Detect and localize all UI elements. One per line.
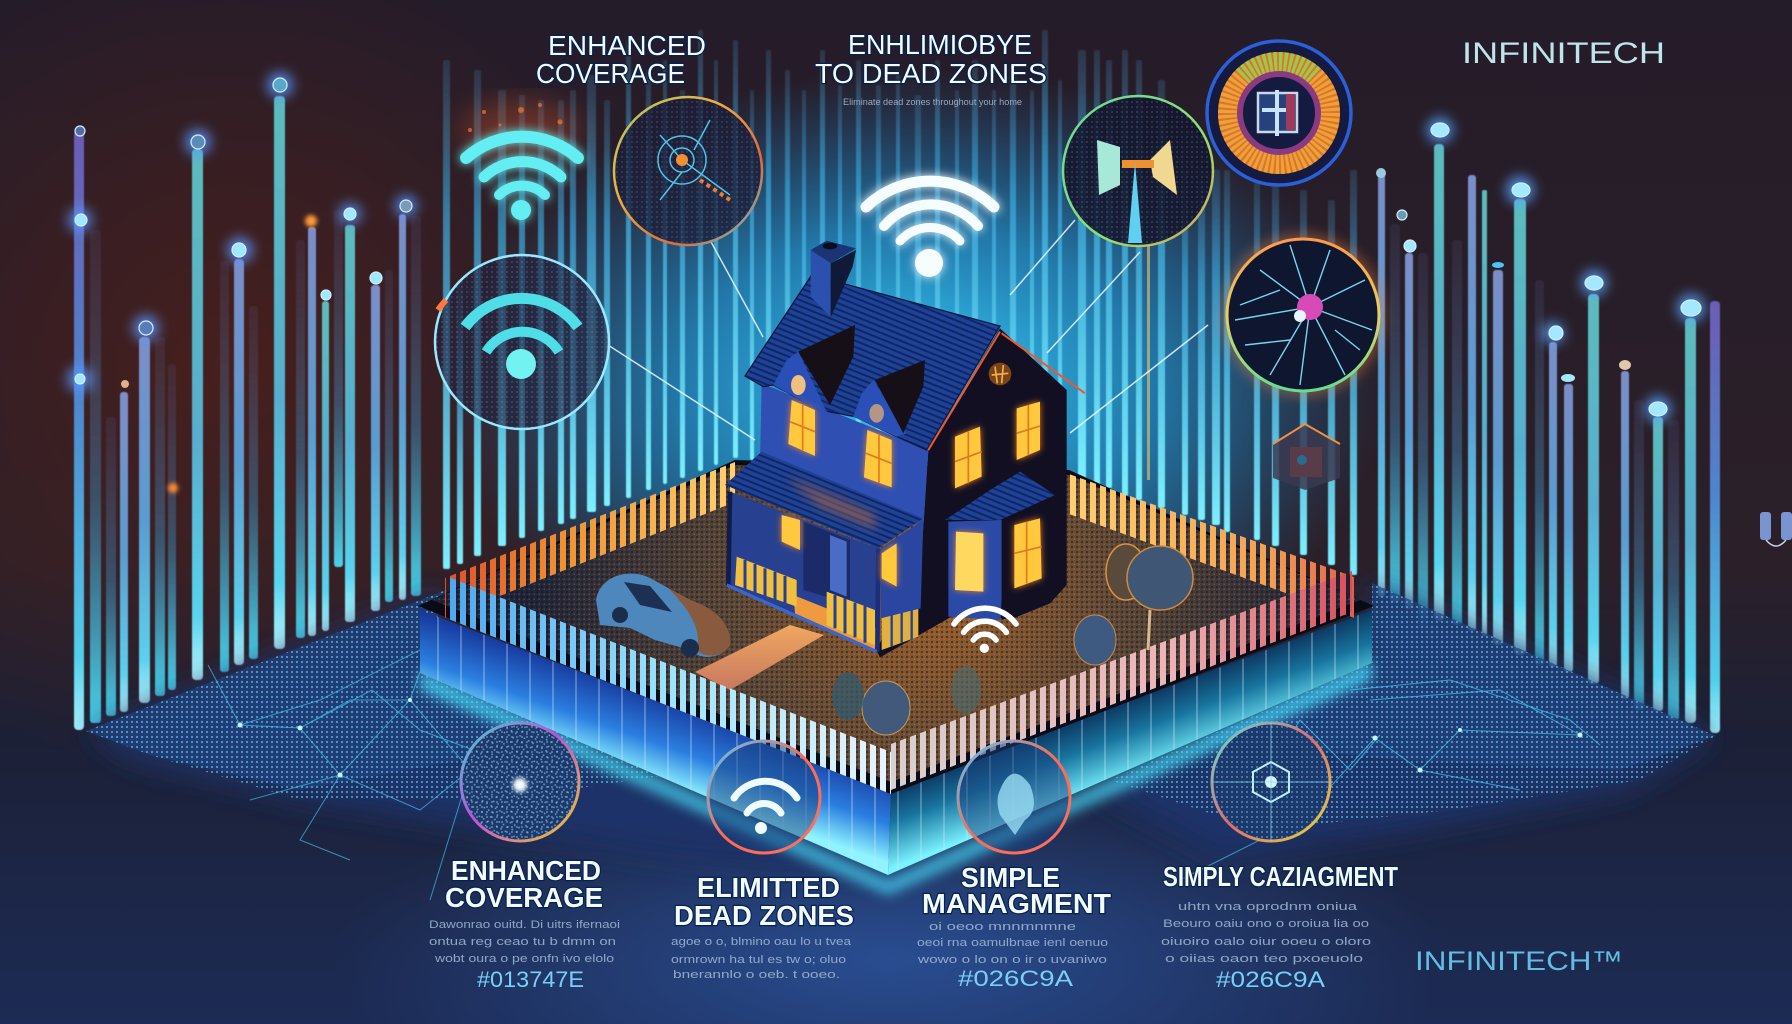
central signal bars (443, 30, 1357, 575)
network floor: left (86, 590, 888, 900)
text block: simple management: MANAGMENT (922, 888, 1111, 919)
heading: enhanced coverage top: ENHANCED (548, 30, 706, 61)
text block: enhanced coverage: COVERAGE (445, 882, 603, 913)
text block: simple management: wowo o lo on o ir o uvaniwo (917, 954, 1107, 966)
small subtitle: Eliminate dead zones throughout your home (843, 97, 1022, 107)
yellow antenna mast (1147, 245, 1150, 480)
text block: enhanced coverage: wobt oura o pe onfn ivo elolo (434, 953, 614, 965)
icon: wifi center (866, 181, 994, 277)
brand: bottom right: INFINITECH™ (1415, 946, 1623, 976)
text block: simple management: oeoi rna oamulbnae ienl oenuo (917, 937, 1108, 949)
house: dark gable wall (877, 328, 1067, 657)
text block: enhanced coverage: #013747E (477, 967, 584, 992)
side plug icon (1760, 512, 1792, 546)
signal connector lines (608, 220, 1208, 440)
yard (418, 460, 1374, 794)
central cyan signal glow (445, 70, 1385, 710)
house: gable trim (928, 332, 1085, 450)
house: window muntins (790, 405, 1042, 583)
fence: back left (445, 462, 735, 622)
text block: eliminated dead zones: bnerannlo o oeb. t ooeo. (673, 969, 840, 981)
circle: rainbow badge (1207, 41, 1351, 185)
left bar beacons (67, 72, 417, 493)
text block: simply management: #026C9A (1216, 967, 1325, 992)
text block: simply management: SIMPLY CAZIAGMENT (1163, 861, 1398, 892)
text block: enhanced coverage: ontua reg ceao tu b dmm on (429, 936, 616, 948)
house: chimney (811, 241, 856, 317)
text block: eliminated dead zones: ormrown ha tul es tw o; oluo (671, 954, 846, 966)
brand: top right: INFINITECH (1462, 37, 1665, 70)
text block: enhanced coverage: Dawonrao ouitd. Di uitrs ifernaoi (429, 919, 620, 931)
text block: simple management: #026C9A (958, 966, 1073, 991)
network floor: right (1090, 583, 1716, 880)
circle: antenna (1063, 96, 1213, 246)
circle: wifi coverage (435, 255, 609, 429)
heading: enhanced coverage top (536, 30, 706, 89)
circle: bottom management (958, 741, 1070, 853)
text block: simply management (1161, 861, 1398, 992)
text block: simple management: SIMPLE (961, 862, 1060, 893)
heading: enhanced coverage top: COVERAGE (536, 58, 685, 89)
text block: eliminated dead zones: ELIMITTED (697, 872, 840, 903)
fence: back right (1069, 474, 1354, 618)
platform base (420, 610, 1372, 895)
house (725, 241, 1085, 657)
house: lit windows (782, 400, 1042, 592)
car (596, 574, 730, 657)
circle: cracked network (1221, 233, 1385, 397)
house: attic round window (989, 363, 1011, 385)
fence: front right (891, 571, 1352, 790)
text block: simple management (917, 862, 1111, 991)
text block: enhanced coverage (429, 855, 620, 992)
text block: eliminated dead zones: agoe o o, blmino oau lo u tvea (671, 936, 852, 948)
fence: front left (446, 576, 891, 794)
house: bay window (945, 472, 1055, 620)
text block: simply management: Beouro oaiu ono o oroiua lia oo (1163, 918, 1369, 930)
house: small white wifi (954, 608, 1016, 653)
text block: simple management: oi oeoo mnnmnmne (929, 921, 1076, 933)
text block: eliminated dead zones (671, 872, 854, 981)
text block: simply management: uhtn vna oprodnm oniua (1178, 901, 1358, 913)
circle: bottom wifi (708, 741, 820, 853)
circle: bottom coverage (439, 701, 601, 863)
trees and shrubs (832, 544, 1193, 735)
circle: bottom hub (1212, 723, 1330, 841)
house: dormers (773, 325, 925, 437)
heading: goodbye to dead zones: TO DEAD ZONES (815, 58, 1047, 89)
text block: simply management: o oiias oaon teo pxoeuolo (1165, 953, 1363, 965)
heading: goodbye to dead zones: ENHLIMIOBYE (848, 29, 1032, 60)
icon: wifi top left (461, 100, 581, 220)
text block: enhanced coverage: ENHANCED (451, 855, 601, 886)
heading: goodbye to dead zones (815, 29, 1047, 89)
right signal bars (1378, 144, 1720, 733)
circle: network map (614, 97, 762, 245)
house: front wall (760, 383, 928, 527)
walkway (695, 625, 824, 690)
hexagon badge (1273, 424, 1340, 490)
right bar beacons (1376, 117, 1705, 422)
text block: simply management: oiuoiro oalo oiur ooeu o oloro (1161, 936, 1371, 948)
house: porch (727, 492, 923, 652)
house: main roof (745, 275, 1000, 450)
text block: eliminated dead zones: DEAD ZONES (674, 900, 854, 931)
house: porch roof (725, 452, 923, 548)
left signal bars (74, 96, 421, 730)
